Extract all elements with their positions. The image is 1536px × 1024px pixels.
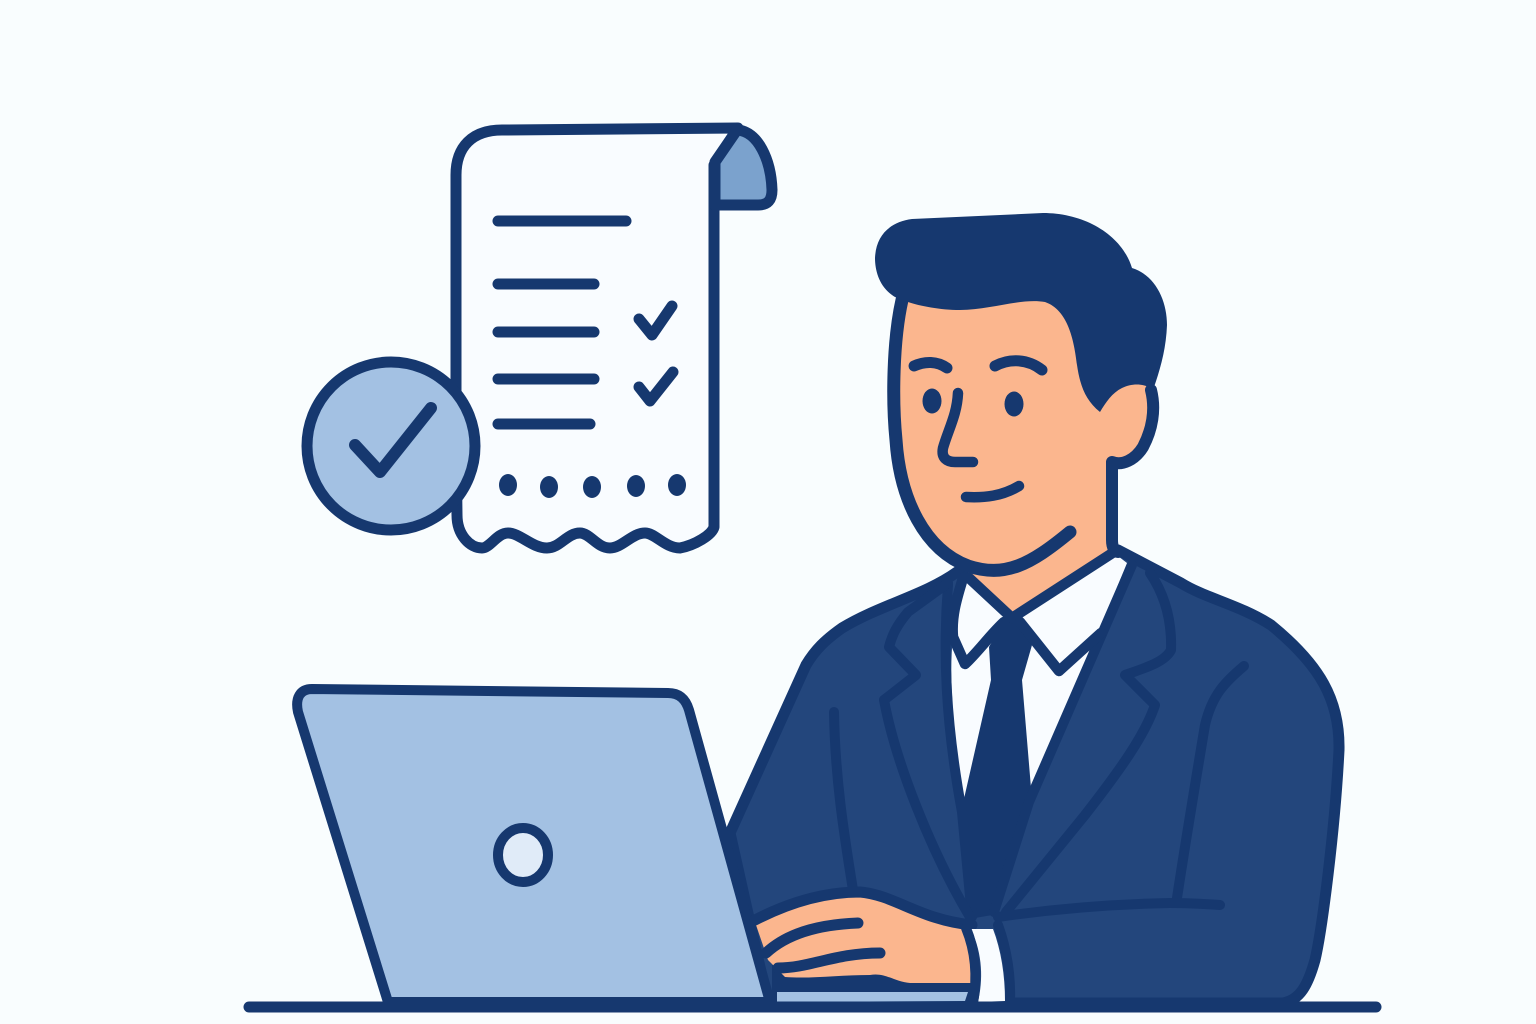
- receipt text lines: [498, 221, 626, 424]
- man: [730, 213, 1339, 1003]
- tie: [961, 620, 1032, 918]
- hand on keyboard: [755, 892, 1010, 1006]
- curled corner: [715, 130, 772, 205]
- hair: [875, 213, 1167, 412]
- shirt cuff: [971, 929, 1005, 1002]
- neck and face skin: [895, 300, 1154, 618]
- desk line: [249, 1002, 1376, 1012]
- nose: [943, 393, 973, 462]
- collar: [953, 552, 1114, 671]
- eyebrows: [914, 361, 1042, 370]
- hand: [756, 895, 975, 983]
- mouth: [966, 486, 1019, 497]
- eyes: [922, 388, 1024, 416]
- receipt paper: [456, 128, 738, 548]
- keyboard base: [772, 965, 976, 1006]
- laptop: [297, 689, 770, 1002]
- keyboard light strip: [777, 992, 968, 1002]
- icon: approval check badge: [307, 362, 475, 530]
- shirt: [951, 548, 1127, 812]
- laptop lid: [297, 689, 770, 1002]
- face outline: [894, 300, 1070, 570]
- suit jacket: [730, 550, 1339, 1003]
- cuff edges: [966, 925, 1010, 1003]
- receipt document: [456, 128, 772, 548]
- lapels and jacket seams: [834, 565, 1244, 917]
- hand outline: [755, 892, 972, 925]
- ear and neck line: [1112, 390, 1153, 552]
- receipt check marks: [639, 306, 673, 401]
- receipt dotted row: [499, 474, 686, 498]
- laptop logo: [498, 828, 548, 882]
- fingers: [766, 923, 880, 968]
